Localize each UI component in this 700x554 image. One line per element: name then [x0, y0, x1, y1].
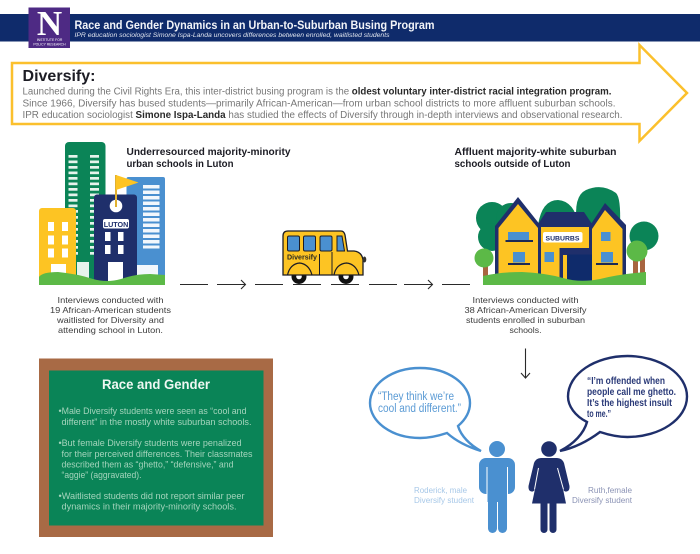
trees [476, 187, 658, 251]
speech bubble: male quote [370, 368, 481, 451]
speech bubble: female quote: “I’m offended when [587, 376, 665, 387]
header title: Race and Gender Dynamics in an Urban-to-Suburban Busing Program [74, 18, 435, 32]
text: Luton interviews: 19 African-American students [50, 305, 171, 315]
flag [115, 175, 117, 207]
door frame [560, 248, 592, 284]
chalkboard bullets: •Male Diversify students were seen as “cool and [58, 406, 246, 416]
Luton sign [103, 219, 129, 228]
logo: Institute for Policy Research: INSTITUTE FOR [37, 38, 63, 42]
label: Ruth: Ruth,female [588, 485, 632, 495]
text: suburban interviews: Interviews conducted with [472, 295, 579, 305]
ground [483, 272, 646, 285]
illustration: suburban school: SUBURBS [546, 236, 580, 242]
illustration: Luton urban schools [39, 142, 165, 285]
intro text [22, 86, 622, 121]
heading: suburban schools [454, 147, 617, 170]
heading: urban schools [126, 147, 291, 170]
arrow: down [521, 348, 530, 378]
navy school [94, 194, 137, 285]
chalkboard title: Race and Gender [102, 377, 211, 392]
panel: chalkboard Race and Gender [39, 358, 273, 537]
house centre [538, 226, 590, 284]
text: Luton interviews [50, 295, 171, 335]
text: suburban interviews: 38 African-American Diversify [464, 305, 587, 315]
speech bubble: female quote: It’s the highest insult [587, 398, 673, 409]
speech bubble: female quote: to me.” [587, 409, 611, 420]
logo: Institute for Policy Research [28, 4, 70, 48]
label: Roderick: Roderick, male [414, 485, 467, 495]
intro text: Launched during the Civil Rights Era, this inter-district busing program is the oldest voluntary inter-district racial integration program. [22, 86, 612, 98]
speech bubble: female quote [560, 356, 687, 451]
heading: Diversify: Diversify: [22, 68, 96, 85]
label: Roderick [414, 485, 475, 505]
house right wing [589, 203, 626, 284]
logo: Institute for Policy Research: POLICY RESEARCH [33, 42, 66, 46]
text: suburban interviews: students enrolled in suburban [466, 315, 585, 325]
blue building [126, 177, 165, 285]
chalkboard bullets: •But female Diversify students were penalized [58, 438, 242, 448]
chalkboard bullets: “aggie” (aggravated). [62, 470, 142, 480]
windows [508, 232, 613, 262]
house left wing [495, 197, 541, 284]
chalkboard bullets: •Waitlisted students did not report similar peer [58, 491, 244, 501]
chalkboard bullets: dynamics in their majority-minority schools. [62, 502, 236, 512]
label: Ruth [572, 485, 633, 505]
label: Roderick: Diversify student [414, 495, 475, 505]
heading: urban schools: urban schools in Luton [126, 159, 234, 170]
yellow building [39, 208, 76, 285]
logo: Institute for Policy Research: N [37, 4, 62, 43]
text: suburban interviews [464, 295, 587, 335]
illustration: Luton urban schools: LUTON [104, 220, 128, 229]
intro text: Since 1966, Diversify has bused students—primarily African-American—from urban school districts to more affluent suburban schools. [22, 98, 616, 110]
heading: suburban schools: Affluent majority-white suburban [454, 147, 617, 158]
heading: urban schools: Underresourced majority-minority [126, 147, 291, 158]
text: Luton interviews: waitlisted for Diversity and [56, 315, 164, 325]
text: suburban interviews: schools. [510, 325, 542, 335]
speech bubble: male quote: cool and different.” [378, 403, 461, 415]
speech bubble: male quote: “They think we’re [378, 391, 454, 403]
dashed road with arrows [180, 280, 470, 289]
speech bubble: female quote: people call me ghetto. [587, 387, 676, 398]
big arrow: Diversify intro panel [12, 45, 687, 141]
Suburbs sign [543, 232, 582, 242]
icon: school bus [283, 231, 366, 284]
text: Luton interviews: attending school in Luton. [58, 325, 163, 335]
heading: suburban schools: schools outside of Luton [454, 159, 571, 170]
icon: female figure [528, 441, 570, 533]
icon: school bus: Diversify [287, 252, 317, 262]
chalkboard bullets: described them as “ghetto,” “defensive,” and [62, 460, 234, 470]
intro text: IPR education sociologist Simone Ispa-Landa has studied the effects of Diversify through in-depth interviews and observational research. [22, 110, 622, 121]
chalkboard bullets: different” in the mostly white suburban schools. [62, 417, 252, 427]
text: Luton interviews: Interviews conducted with [58, 295, 164, 305]
icon: male figure [479, 441, 515, 533]
header subtitle: IPR education sociologist Simone Ispa-Landa uncovers differences between enrolled, waitlisted students [74, 32, 390, 39]
ground [39, 272, 165, 285]
illustration: suburban school [474, 187, 658, 285]
chalkboard bullets: for their perceived differences. Their classmates [62, 449, 253, 459]
label: Ruth: Diversify student [572, 495, 633, 505]
header band [0, 14, 700, 42]
chalkboard bullets [58, 406, 253, 512]
